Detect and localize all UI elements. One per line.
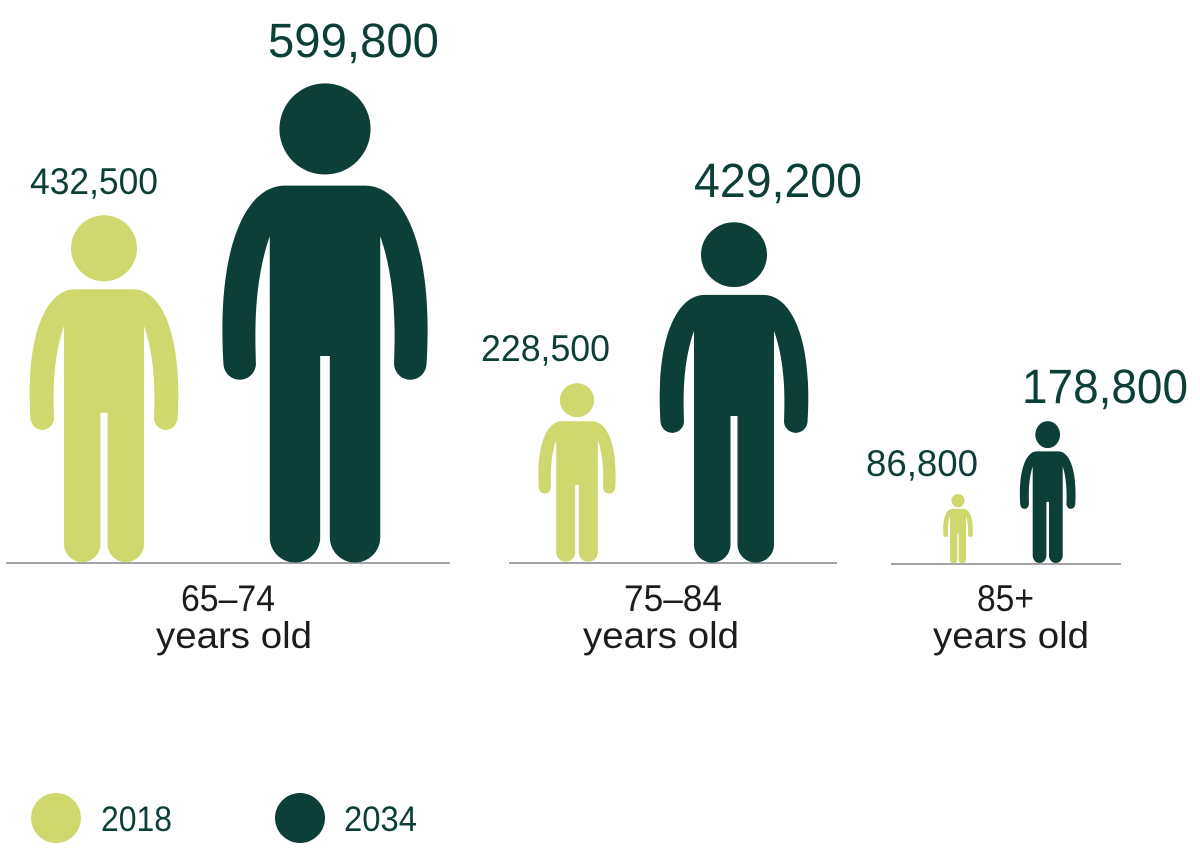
- value: 178,800: 178,800: [1022, 361, 1188, 414]
- group: 65–74 years old: [6, 15, 450, 656]
- axis label: 65–74 years old: 65–74: [181, 578, 275, 619]
- value: 228,500: 228,500: [481, 328, 610, 369]
- legend item: 2034: 2034: [344, 800, 417, 839]
- axis label: 85+ years old: [933, 578, 1089, 656]
- value: 432,500: 432,500: [30, 161, 158, 202]
- legend: [31, 793, 417, 843]
- person icon: 2018, 65–74: [30, 215, 178, 562]
- axis label: 65–74 years old: years old: [156, 615, 312, 656]
- person icon: 2034, 75–84: [660, 222, 808, 563]
- legend item: 2034: [275, 793, 417, 843]
- axis label: 75–84 years old: 75–84: [624, 578, 722, 619]
- value: 429,200: 429,200: [694, 155, 862, 208]
- baseline: 75–84: [509, 562, 837, 564]
- legend item: 2018: 2018: [101, 800, 172, 839]
- legend item: 2018: [31, 793, 172, 843]
- axis label: 85+ years old: 85+: [977, 578, 1034, 619]
- baseline: 65–74: [6, 562, 450, 564]
- axis label: 65–74 years old: [156, 578, 312, 656]
- axis label: 75–84 years old: [583, 578, 739, 656]
- person icon: 2018, 85+: [943, 494, 973, 563]
- value: 599,800: 599,800: [268, 15, 439, 68]
- group: 75–84 years old: [481, 155, 862, 656]
- person icon: 2034, 65–74: [222, 83, 428, 563]
- baseline: 85+: [891, 563, 1121, 565]
- axis label: 85+ years old: years old: [933, 615, 1089, 656]
- person icon: 2034, 85+: [1020, 421, 1076, 563]
- axis label: 75–84 years old: years old: [583, 615, 739, 656]
- value: 86,800: 86,800: [866, 443, 978, 484]
- group: 85+ years old: [866, 361, 1188, 656]
- person icon: 2018, 75–84: [538, 383, 616, 562]
